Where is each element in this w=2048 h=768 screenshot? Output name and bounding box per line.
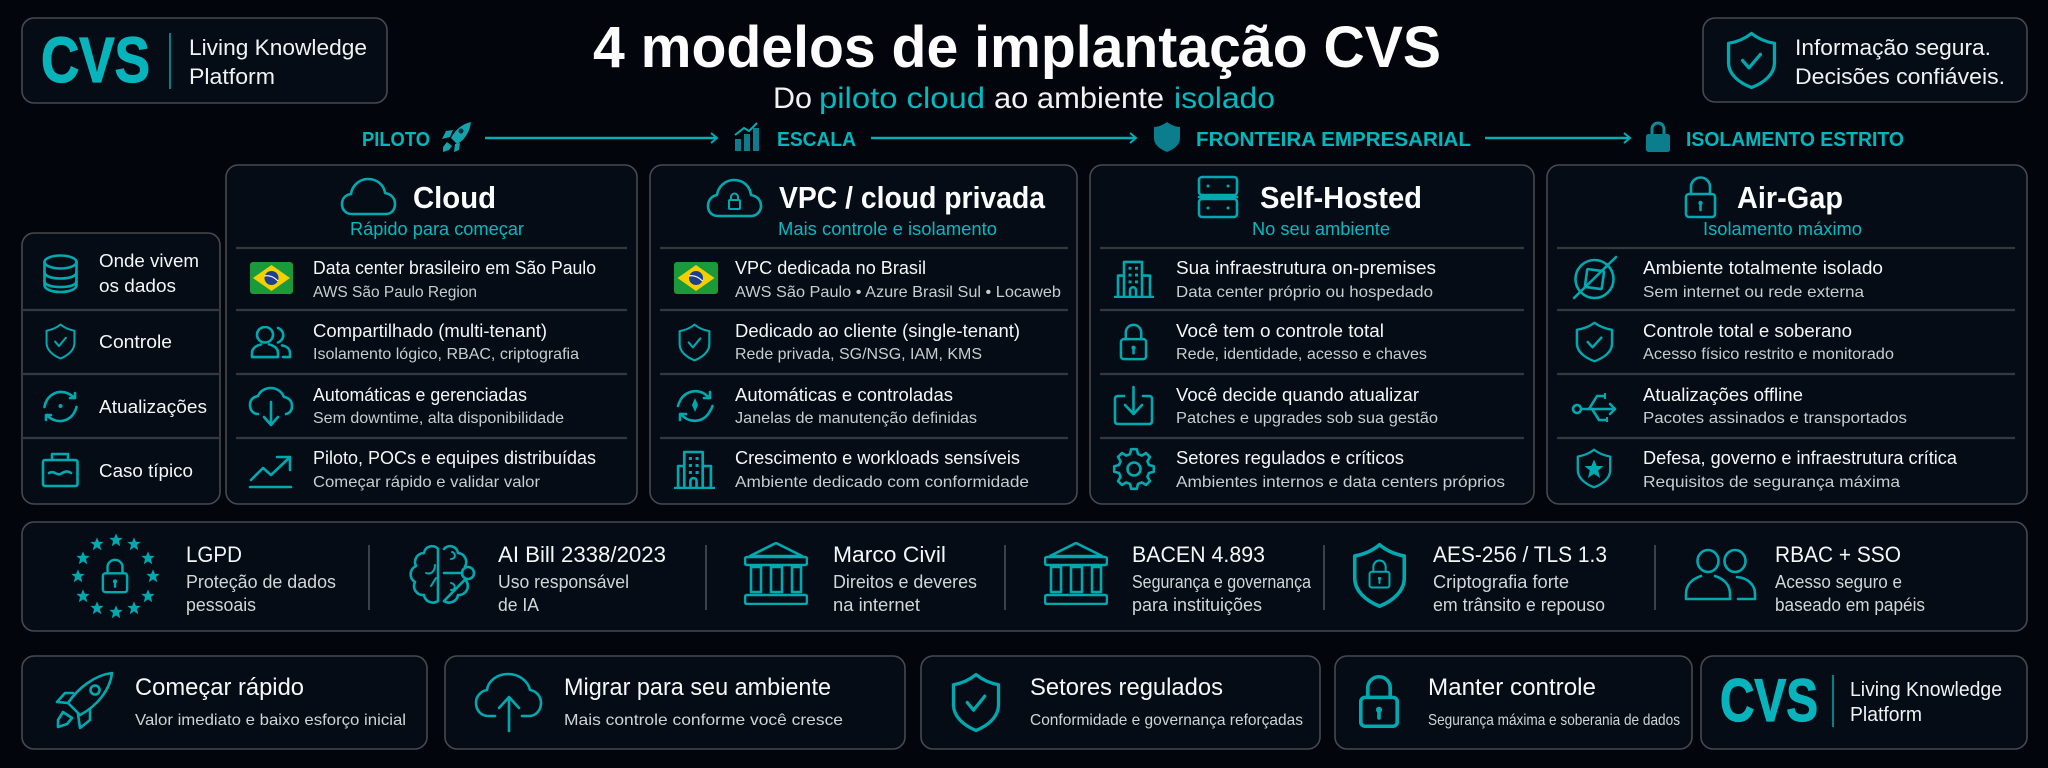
arrow: fronteira to isolamento <box>1485 133 1630 143</box>
row: dedicado <box>735 320 1020 363</box>
security text: Informação segura. <box>1795 35 1991 60</box>
item: aes: AES-256 / TLS 1.3 <box>1433 542 1607 567</box>
text: começar rápido <box>135 674 406 729</box>
icon: database <box>44 256 76 292</box>
item: rbac: Acesso seguro e <box>1775 572 1902 592</box>
row: data center: Data center brasileiro em São Paulo <box>313 257 596 278</box>
card: manter controle <box>1335 656 1692 749</box>
item: lgpd: pessoais <box>186 595 256 615</box>
panel: air-gap <box>1547 165 2027 504</box>
text: setores regulados: Conformidade e governança reforçadas <box>1030 712 1303 729</box>
icon: briefcase <box>43 454 78 486</box>
panel: vpc <box>650 165 1077 504</box>
row: piloto pocs: Piloto, POCs e equipes distribuídas <box>313 447 596 468</box>
row: compartilhado: Isolamento lógico, RBAC, criptografia <box>313 346 579 363</box>
row: setores <box>1176 447 1505 491</box>
icon: update clock <box>44 392 76 421</box>
text: migrar <box>564 674 843 729</box>
row: dedicado: Rede privada, SG/NSG, IAM, KMS <box>735 346 982 363</box>
label: onde vivem os dados: Onde vivem <box>99 250 199 271</box>
item: ai bill: de IA <box>498 595 539 615</box>
item: ai bill <box>498 542 666 615</box>
icon: rocket <box>57 673 112 728</box>
subtitle: piloto cloud <box>819 82 985 115</box>
subtitle: isolado <box>1174 82 1275 115</box>
icon: shield lock <box>1355 545 1404 606</box>
subtitle: ao ambiente <box>994 82 1164 115</box>
heading: self-hosted: Self-Hosted <box>1260 180 1422 215</box>
icon: shield check <box>1729 33 1774 88</box>
item: rbac <box>1775 542 1925 615</box>
icon: cloud <box>342 179 395 214</box>
icon: brazil flag <box>250 262 293 294</box>
row: compartilhado: Compartilhado (multi-tenant) <box>313 320 547 341</box>
row: infraestrutura: Data center próprio ou hospedado <box>1176 284 1433 301</box>
row: automaticas gerenciadas: Automáticas e gerenciadas <box>313 384 527 405</box>
icon: cloud lock <box>708 180 761 216</box>
panel: row labels <box>22 233 220 504</box>
icon: usb <box>1573 393 1615 422</box>
stage: isolamento estrito: ISOLAMENTO ESTRITO <box>1686 129 1904 151</box>
label: caso típico: Caso típico <box>99 460 193 481</box>
icon: lgpd stars and lock <box>71 533 160 618</box>
row: automaticas controladas <box>735 384 977 427</box>
item: aes: em trânsito e repouso <box>1433 595 1605 615</box>
row: crescimento <box>735 447 1029 491</box>
row: atualizar: Patches e upgrades sob sua gestão <box>1176 410 1438 427</box>
row: data center <box>313 257 596 301</box>
icon: bank <box>745 543 807 604</box>
row: dedicado: Dedicado ao cliente (single-tenant) <box>735 320 1020 341</box>
row: soberano: Acesso físico restrito e monitorado <box>1643 346 1894 363</box>
row: compartilhado <box>313 320 579 363</box>
logo tagline: Platform <box>1850 704 1922 726</box>
icon: building <box>675 452 714 488</box>
logo badge bottom right <box>1701 656 2027 749</box>
row: atualizar: Você decide quando atualizar <box>1176 384 1419 405</box>
row: crescimento: Crescimento e workloads sensíveis <box>735 447 1020 468</box>
stage: fronteira empresarial: FRONTEIRA EMPRESARIAL <box>1196 129 1471 151</box>
item: bacen: para instituições <box>1132 595 1262 615</box>
icon: filled lock <box>1646 123 1670 152</box>
item: rbac: RBAC + SSO <box>1775 542 1901 567</box>
icon: trend up <box>250 457 291 487</box>
icon: no network <box>1574 257 1616 298</box>
icon: brazil flag <box>674 262 718 294</box>
label: onde vivem os dados <box>99 250 199 296</box>
icon: shield <box>47 325 74 358</box>
subtitle <box>773 82 1275 115</box>
row: controle total: Rede, identidade, acesso e chaves <box>1176 346 1427 363</box>
row: soberano <box>1643 320 1894 363</box>
stage: piloto: PILOTO <box>362 129 430 151</box>
item: aes: Criptografia forte <box>1433 572 1569 592</box>
logo tagline: Living Knowledge <box>189 35 367 60</box>
subheading: air-gap: Isolamento máximo <box>1703 219 1862 239</box>
item: aes <box>1433 542 1607 615</box>
label: onde vivem os dados: os dados <box>99 275 176 296</box>
logo badge top left <box>22 18 387 103</box>
card: começar rápido <box>22 656 427 749</box>
icon: rocket small <box>442 122 471 152</box>
row: defesa: Defesa, governo e infraestrutura crítica <box>1643 447 1958 468</box>
label: atualizações: Atualizações <box>99 396 207 417</box>
item: ai bill: Uso responsável <box>498 572 629 592</box>
item: lgpd <box>186 542 336 615</box>
card: setores regulados <box>921 656 1320 749</box>
logo tagline <box>189 35 367 89</box>
subheading: cloud: Rápido para começar <box>350 219 524 239</box>
arrow: piloto to escala <box>485 133 717 143</box>
item: lgpd: LGPD <box>186 542 242 567</box>
row: isolado <box>1643 257 1883 301</box>
label: controle: Controle <box>99 331 172 352</box>
item: marco civil: Direitos e deveres <box>833 572 977 592</box>
panel: cloud <box>226 165 637 504</box>
icon: cloud upload <box>476 674 541 731</box>
row: crescimento: Ambiente dedicado com conformidade <box>735 474 1029 491</box>
item: lgpd: Proteção de dados <box>186 572 336 592</box>
panel: self-hosted <box>1090 165 1534 504</box>
icon: padlock <box>1686 178 1715 217</box>
icon: growth chart <box>735 123 759 151</box>
icon: filled shield <box>1154 122 1180 152</box>
icon: lock <box>1121 325 1146 359</box>
security text: Decisões confiáveis. <box>1795 64 2005 89</box>
row: defesa <box>1643 447 1958 491</box>
icon: refresh <box>678 391 712 421</box>
icon: people <box>252 327 290 357</box>
logo tagline: Platform <box>189 64 275 89</box>
row: offline <box>1643 384 1907 427</box>
text: começar rápido: Começar rápido <box>135 674 304 701</box>
subheading: self-hosted: No seu ambiente <box>1252 219 1390 239</box>
subtitle: Do <box>773 82 812 115</box>
row: vpc dedicada: VPC dedicada no Brasil <box>735 257 926 278</box>
icon: cloud download <box>250 388 292 425</box>
row: automaticas gerenciadas: Sem downtime, alta disponibilidade <box>313 410 564 427</box>
text: setores regulados <box>1030 674 1303 729</box>
row: automaticas controladas: Janelas de manutenção definidas <box>735 410 977 427</box>
logo wordmark: CVS <box>41 24 150 96</box>
security badge top right <box>1703 18 2027 102</box>
panel: compliance band <box>22 522 2027 631</box>
item: bacen: BACEN 4.893 <box>1132 542 1265 567</box>
row: defesa: Requisitos de segurança máxima <box>1643 474 1900 491</box>
item: bacen <box>1132 542 1312 615</box>
row: piloto pocs: Começar rápido e validar valor <box>313 474 541 491</box>
icon: gear <box>1114 449 1154 489</box>
logo tagline <box>1850 679 2002 726</box>
row: piloto pocs <box>313 447 596 491</box>
item: bacen: Segurança e governança <box>1132 572 1312 592</box>
icon: lock <box>1361 677 1397 726</box>
row: soberano: Controle total e soberano <box>1643 320 1852 341</box>
text: manter controle <box>1428 674 1680 729</box>
logo wordmark: CVS <box>1720 667 1818 734</box>
row: controle total <box>1176 320 1427 363</box>
row: atualizar <box>1176 384 1438 427</box>
text: manter controle: Manter controle <box>1428 674 1596 701</box>
row: setores: Ambientes internos e data centers próprios <box>1176 474 1505 491</box>
stage: escala: ESCALA <box>777 129 856 151</box>
item: rbac: baseado em papéis <box>1775 595 1925 615</box>
heading: cloud: Cloud <box>413 180 496 215</box>
security text <box>1795 35 2005 89</box>
text: setores regulados: Setores regulados <box>1030 674 1223 701</box>
item: ai bill: AI Bill 2338/2023 <box>498 542 666 567</box>
row: vpc dedicada <box>735 257 1061 301</box>
row: infraestrutura <box>1176 257 1436 301</box>
row: setores: Setores regulados e críticos <box>1176 447 1404 468</box>
item: marco civil <box>833 542 977 615</box>
text: começar rápido: Valor imediato e baixo esforço inicial <box>135 712 406 729</box>
icon: brain <box>411 546 474 603</box>
logo tagline: Living Knowledge <box>1850 679 2002 701</box>
icon: people <box>1686 550 1755 599</box>
item: marco civil: Marco Civil <box>833 542 946 567</box>
text: manter controle: Segurança máxima e soberania de dados <box>1428 712 1680 729</box>
subheading: vpc: Mais controle e isolamento <box>778 219 997 239</box>
row: offline: Atualizações offline <box>1643 384 1803 405</box>
row: offline: Pacotes assinados e transportados <box>1643 410 1907 427</box>
icon: shield <box>1577 323 1612 361</box>
row: automaticas gerenciadas <box>313 384 564 427</box>
icon: star shield <box>1578 450 1610 487</box>
item: marco civil: na internet <box>833 595 920 615</box>
row: vpc dedicada: AWS São Paulo • Azure Brasil Sul • Locaweb <box>735 284 1061 301</box>
title: 4 modelos de implantação CVS <box>593 15 1441 80</box>
row: isolado: Sem internet ou rede externa <box>1643 284 1864 301</box>
progression bar <box>362 122 1904 152</box>
heading: air-gap: Air-Gap <box>1737 180 1843 215</box>
arrow: escala to fronteira <box>871 133 1136 143</box>
icon: bank <box>1045 543 1107 604</box>
row: isolado: Ambiente totalmente isolado <box>1643 257 1883 278</box>
row: infraestrutura: Sua infraestrutura on-premises <box>1176 257 1436 278</box>
row: controle total: Você tem o controle total <box>1176 320 1384 341</box>
icon: server <box>1199 177 1237 217</box>
card: migrar <box>445 656 905 749</box>
icon: shield check <box>954 675 998 730</box>
icon: download box <box>1115 387 1152 424</box>
row: data center: AWS São Paulo Region <box>313 284 477 301</box>
icon: building <box>1115 262 1153 297</box>
row: automaticas controladas: Automáticas e controladas <box>735 384 953 405</box>
icon: shield <box>680 325 709 360</box>
text: migrar: Mais controle conforme você cresce <box>564 712 843 729</box>
text: migrar: Migrar para seu ambiente <box>564 674 831 701</box>
heading: vpc: VPC / cloud privada <box>779 180 1046 215</box>
